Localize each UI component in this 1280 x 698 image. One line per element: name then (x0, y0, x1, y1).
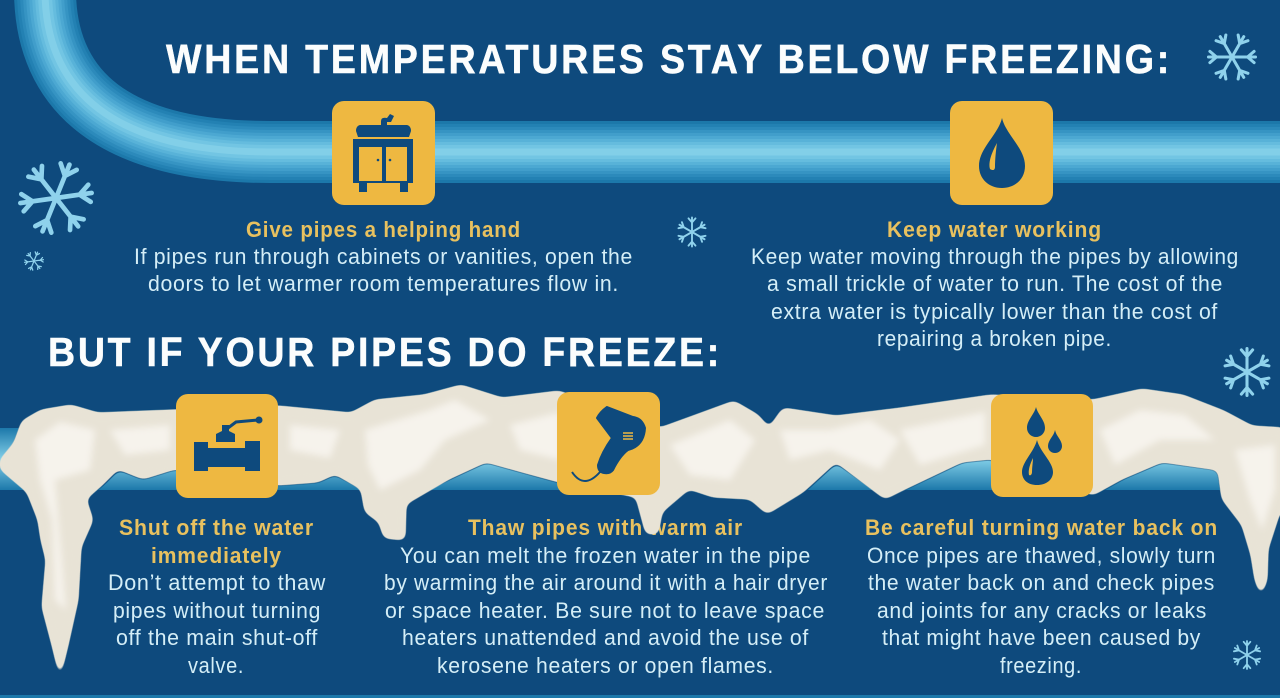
panel: be careful turning water back on text: that might have been caused by (882, 625, 1201, 650)
snowflake: middle right (1224, 348, 1270, 396)
panel: shut off the water text: off the main shut-off (116, 625, 318, 650)
panel: shut off the water text: Don’t attempt to thaw (108, 570, 326, 595)
panel: keep water working text: repairing a broken pipe. (877, 326, 1112, 351)
icon: hair dryer (557, 392, 660, 495)
panel: give pipes a helping hand text (134, 217, 633, 296)
panel: keep water working text: Keep water working (887, 217, 1102, 242)
ice covering the lower pipe (0, 385, 1280, 678)
panel: thaw pipes with warm air text (384, 515, 828, 678)
heading: when temperatures stay below freezing: WHEN TEMPERATURES STAY BELOW FREEZING: (166, 36, 1172, 82)
panel: keep water working text (751, 217, 1239, 351)
icon: shut-off valve (176, 394, 278, 498)
panel: keep water working text: Keep water moving through the pipes by allowing (751, 244, 1239, 269)
snowflake: bottom right (1233, 641, 1261, 669)
panel: keep water working text: a small trickle of water to run. The cost of the (767, 271, 1223, 296)
panel: be careful turning water back on text: and joints for any cracks or leaks (877, 598, 1207, 623)
panel: thaw pipes with warm air text: heaters unattended and avoid the use of (402, 625, 809, 650)
icon: water drop (950, 101, 1053, 205)
panel: be careful turning water back on text (865, 515, 1218, 678)
panel: thaw pipes with warm air text: by warming the air around it with a hair dryer (384, 570, 828, 595)
snowflake: top right (1200, 25, 1264, 89)
panel: thaw pipes with warm air text: Thaw pipes with warm air (468, 515, 743, 540)
panel: thaw pipes with warm air text: kerosene heaters or open flames. (437, 653, 774, 678)
panel: shut off the water text: pipes without turning (113, 598, 321, 623)
panel: thaw pipes with warm air text: or space heater. Be sure not to leave space (385, 598, 825, 623)
lower frozen water pipe (0, 428, 1222, 490)
panel: shut off the water text: valve. (188, 653, 244, 678)
panel: give pipes a helping hand text: Give pipes a helping hand (246, 217, 521, 242)
panel: shut off the water text: Shut off the water (119, 515, 314, 540)
bottom edge line (0, 695, 1280, 698)
icon: three water drops (991, 394, 1093, 497)
snowflake: center (678, 218, 706, 246)
panel: give pipes a helping hand text: doors to let warmer room temperatures flow in. (148, 271, 619, 296)
panel: be careful turning water back on text: Once pipes are thawed, slowly turn (867, 543, 1216, 568)
panel: shut off the water text: immediately (151, 543, 282, 568)
panel: keep water working text: extra water is typically lower than the cost of (771, 299, 1218, 324)
upper curved water pipe (45, 0, 1280, 152)
icon: sink vanity (332, 101, 435, 205)
heading: but if your pipes do freeze: BUT IF YOUR PIPES DO FREEZE: (48, 329, 722, 375)
panel: be careful turning water back on text: freezing. (1000, 653, 1082, 678)
panel: give pipes a helping hand text: If pipes run through cabinets or vanities, open the (134, 244, 633, 269)
panel: be careful turning water back on text: the water back on and check pipes (868, 570, 1215, 595)
panel: thaw pipes with warm air text: You can melt the frozen water in the pipe (400, 543, 811, 568)
snowflake: small left (22, 249, 46, 273)
snowflake: large left (10, 151, 102, 245)
panel: be careful turning water back on text: Be careful turning water back on (865, 515, 1218, 540)
panel: shut off the water text (108, 515, 326, 678)
